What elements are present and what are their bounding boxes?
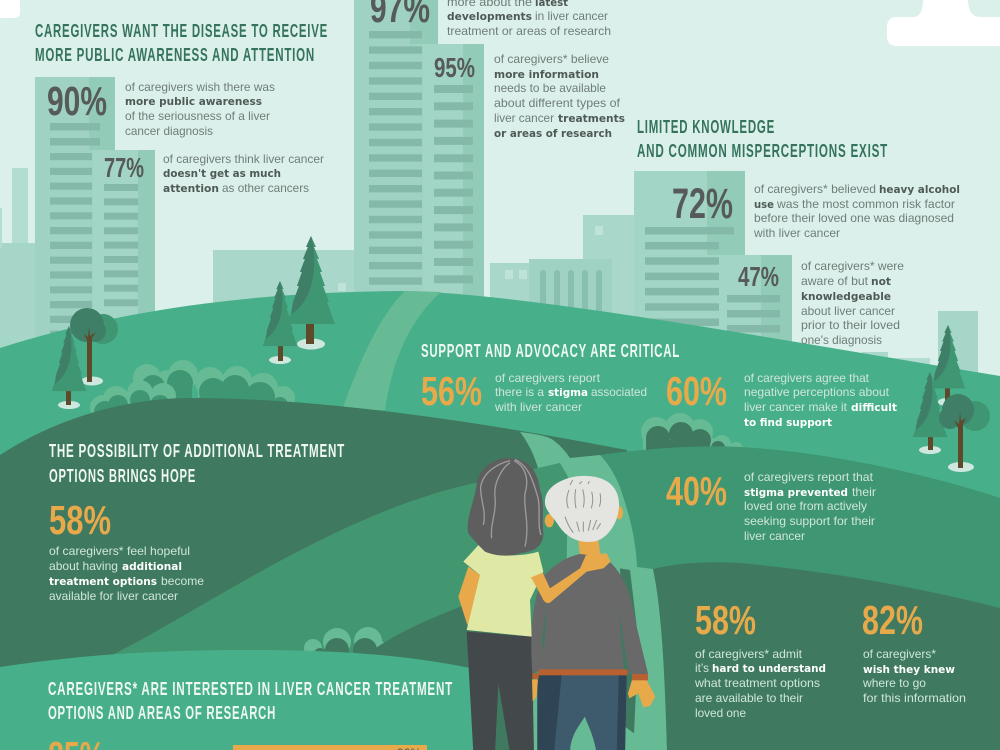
text: 72% description: was the most common risk factor — [776, 197, 955, 211]
text: 90% description: of the seriousness of a liver — [125, 109, 270, 123]
text: 58% hopeful description: available for liver cancer — [49, 589, 178, 603]
text: 58% hard to understand description: are available to their — [695, 691, 803, 705]
text: 90% description — [125, 80, 275, 138]
bar chart: orange bar cropped at bottom edge — [233, 745, 427, 750]
text: 90% description: cancer diagnosis — [125, 124, 213, 138]
text: 95% description — [494, 52, 625, 140]
text: 90% description: more public awareness — [125, 95, 262, 108]
text: 82% description — [862, 647, 966, 705]
text: 82% description: wish they knew — [863, 663, 955, 676]
woman: hair highlights — [481, 459, 541, 547]
text: 56% description: with liver cancer — [494, 400, 582, 414]
stat: 82%: 82% — [862, 597, 923, 643]
text: 47% description: prior to their loved — [801, 318, 900, 332]
stat: 90%: 90% — [47, 78, 107, 124]
stat: 56%: 56% — [421, 368, 482, 414]
path: light trail curving behind the figures — [520, 432, 667, 750]
text: 77% description: attention — [163, 182, 219, 195]
heading: limited knowledge: LIMITED KNOWLEDGE — [637, 117, 775, 137]
text: 97% description: treatment or areas of research — [447, 24, 611, 38]
text: 60% description: liver cancer make it — [744, 400, 848, 414]
text: 47% description: not — [871, 275, 891, 288]
text: 82% description: where to go — [862, 676, 926, 690]
text: 97% description: developments — [447, 10, 532, 23]
heading: interest in treatment and research — [48, 679, 453, 723]
man: sweater — [531, 554, 648, 675]
stat: 47%: 47% — [738, 261, 779, 292]
text: 47% description: of caregivers* were — [801, 259, 904, 273]
text: 40% description: of caregivers report that — [744, 470, 874, 484]
text: 82% description: for this information — [863, 691, 966, 705]
text: 58% hopeful description: of caregivers* feel hopeful — [49, 544, 190, 558]
stat: 72%: 72% — [672, 180, 733, 228]
text: 95% description: of caregivers* believe — [494, 52, 609, 66]
text: 95% description: treatments — [558, 112, 625, 125]
text: 58% hard to understand description: hard to understand — [712, 662, 826, 675]
bushes: left group — [90, 360, 295, 423]
heading: interest in treatment and research: OPTIONS AND AREAS OF RESEARCH — [48, 703, 276, 723]
stat: 58% hard to understand: 58% — [695, 597, 756, 643]
text: 72% description: with liver cancer — [753, 226, 840, 240]
woman: shirt — [463, 543, 543, 637]
text: 58% hard to understand description — [694, 647, 826, 720]
man: neck and ears — [545, 506, 623, 557]
text: 95% description: more information — [494, 68, 599, 81]
text: 58% hopeful description: about having — [49, 559, 118, 573]
text: 72% description: heavy alcohol — [879, 183, 960, 196]
man: jeans — [537, 675, 627, 750]
text: 56% description: stigma — [548, 386, 588, 399]
building: 97% statistic — [354, 0, 438, 310]
text: 77% description — [163, 152, 324, 195]
man: white hair — [545, 476, 619, 542]
tree: small pine — [263, 281, 297, 364]
hill: dark lower wedge — [370, 580, 530, 750]
bush: right of centre — [641, 413, 743, 456]
text: 97% description: in liver cancer — [535, 9, 608, 23]
building: 90% statistic — [35, 77, 115, 347]
text: 82% description: of caregivers* — [863, 647, 936, 661]
text: 56% description — [494, 371, 647, 414]
heading: interest in treatment and research: CAREGIVERS* ARE INTERESTED IN LIVER CANCER TREATMENT — [48, 679, 453, 699]
text: 95% description: or areas of research — [494, 127, 612, 140]
building: 47% statistic — [719, 255, 792, 365]
text: 58% hopeful description: become — [161, 574, 204, 588]
text: 77% description: of caregivers think liver cancer — [163, 152, 324, 166]
text: 60% description: negative perceptions about — [744, 385, 890, 399]
text: 56% description: of caregivers report — [495, 371, 601, 385]
hill: back hill — [0, 291, 1000, 750]
building: 72% statistic — [634, 171, 745, 361]
man: dark creases by the arms — [542, 603, 628, 670]
building: 77% statistic — [93, 150, 155, 340]
man: belt and cuffs — [532, 669, 648, 680]
tree: left round tree — [70, 308, 118, 386]
stat: 95%: 95% — [434, 52, 475, 83]
text: 58% hopeful description: treatment options — [49, 575, 157, 588]
text: 60% description: of caregivers agree that — [744, 371, 870, 385]
text: 58% hard to understand description: of caregivers* admit — [695, 647, 803, 661]
text: 72% description — [753, 182, 960, 240]
wedge of ground beside man — [620, 568, 638, 733]
path: winding trail on back hill — [342, 291, 441, 410]
text: 60% description: difficult — [851, 401, 897, 414]
bush: above bottom hill — [304, 627, 387, 662]
woman: left arm — [458, 567, 480, 625]
heading: public awareness: MORE PUBLIC AWARENESS AND ATTENTION — [35, 45, 315, 65]
heading: treatment options bring hope: THE POSSIBILITY OF ADDITIONAL TREATMENT — [49, 441, 345, 461]
text: 58% hopeful description — [49, 544, 204, 603]
text: 47% description: aware of but — [801, 274, 869, 288]
heading: treatment options bring hope — [49, 441, 345, 486]
text: 58% hard to understand description: it’s — [695, 661, 709, 675]
text: 40% description: stigma prevented — [744, 486, 848, 499]
text: 40% description — [744, 470, 876, 543]
text: 40% description: loved one from actively — [744, 499, 867, 513]
man: left hand — [532, 679, 538, 702]
text: 58% hopeful description: additional — [122, 560, 182, 573]
text: 77% description: as other cancers — [222, 181, 309, 195]
stat: 77%: 77% — [104, 152, 144, 183]
text: 60% description — [744, 371, 897, 429]
text: 95% description: about different types of — [494, 96, 621, 110]
heading: public awareness: CAREGIVERS WANT THE DISEASE TO RECEIVE — [35, 21, 328, 41]
text: 47% description: about liver cancer — [801, 304, 895, 318]
text: 40% description: seeking support for their — [744, 514, 875, 528]
text: 56% description: there is a — [495, 385, 544, 399]
text: 95% description: needs to be available — [494, 81, 606, 95]
text: 40% description: their — [852, 485, 876, 499]
stat: 58% hopeful: 58% — [49, 497, 111, 543]
hill: right mid hill — [600, 446, 1000, 750]
cloud: top left — [0, 0, 20, 18]
skyline: background buildings — [0, 168, 978, 388]
text: 47% description — [801, 259, 904, 347]
tree: right round tree — [939, 394, 990, 472]
text: 90% description: of caregivers wish there was — [125, 80, 275, 94]
text: 97% description — [447, 0, 611, 38]
text: 56% description: associated — [591, 385, 647, 399]
woman: hair — [468, 458, 543, 556]
text: 40% description: liver cancer — [744, 529, 805, 543]
heading: limited knowledge — [637, 117, 888, 161]
tree: right small pine — [913, 372, 947, 454]
text: 77% description: doesn't get as much — [163, 167, 281, 180]
building: 95% statistic — [423, 44, 484, 310]
text: 72% description: of caregivers* believed — [754, 182, 876, 196]
tree: tall pine — [287, 236, 335, 350]
hill: dark left hill — [0, 398, 627, 750]
illustration: couple seen from behind — [458, 458, 655, 750]
text: 60% description: to find support — [744, 416, 832, 429]
text: 72% description: use — [754, 198, 774, 211]
hill: dark lower right panel — [653, 562, 1000, 750]
heading: treatment options bring hope: OPTIONS BRINGS HOPE — [49, 466, 196, 486]
stat: 40%: 40% — [666, 468, 727, 514]
text: 58% hard to understand description: loved one — [695, 706, 746, 720]
text: 58% hard to understand description: what treatment options — [694, 676, 820, 690]
heading: support and advocacy: SUPPORT AND ADVOCACY ARE CRITICAL — [421, 341, 680, 361]
hill: bottom foreground hill — [0, 650, 480, 750]
stat: 60%: 60% — [666, 368, 727, 414]
text: 72% description: before their loved one was diagnosed — [754, 211, 954, 225]
text: 47% description: knowledgeable — [801, 290, 891, 303]
man: right hand — [628, 680, 655, 707]
tree: right tall pine — [931, 325, 965, 406]
tree: left pine — [52, 326, 86, 409]
hill: mid green slope — [110, 463, 640, 750]
heading: public awareness — [35, 21, 328, 65]
text: 47% description: one's diagnosis — [801, 333, 882, 347]
cloud: top right — [887, 0, 1000, 46]
man: hair strands — [565, 480, 601, 533]
text: 95% description: liver cancer — [494, 111, 554, 125]
woman: trousers — [467, 632, 534, 750]
woman: arm around man — [531, 553, 611, 603]
